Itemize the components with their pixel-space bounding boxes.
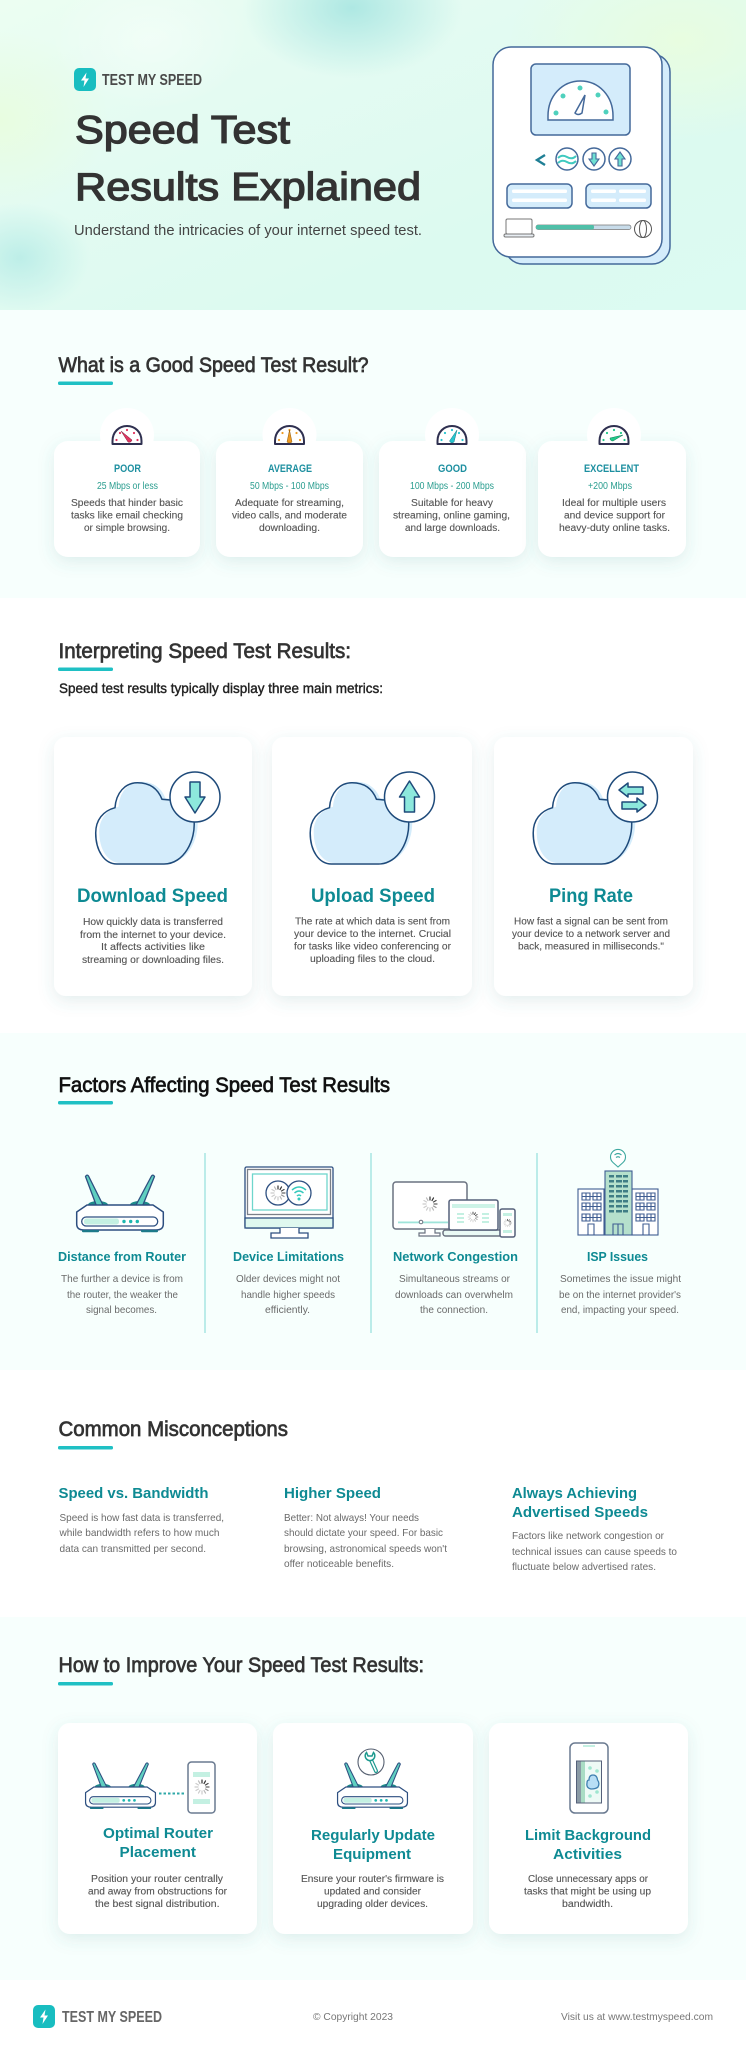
factor: network congestion (393, 1182, 518, 1316)
heading: What is a Good Speed Test Result? (58, 354, 368, 377)
card: optimal router placement (58, 1723, 257, 1934)
misconception: always achieving advertised speeds: Advertised Speeds (512, 1504, 648, 1521)
icon: devices (393, 1182, 515, 1237)
title: Speed Test (75, 109, 290, 152)
heading: Interpreting Speed Test Results: (58, 640, 351, 663)
icon: monitor (245, 1167, 333, 1238)
factor: device limitations (233, 1167, 344, 1316)
misconception: higher speed: offer noticeable benefits. (284, 1558, 394, 1570)
card: average: AVERAGE (268, 463, 312, 475)
card: upload speed: The rate at which data is sent from (295, 916, 450, 928)
icon: phone with cloud (570, 1743, 608, 1813)
illustration: speed test device (493, 47, 670, 264)
factor: network congestion: the connection. (420, 1304, 488, 1316)
icon: buildings (578, 1149, 658, 1235)
title (75, 109, 421, 209)
card: excellent: Ideal for multiple users (562, 498, 666, 509)
card: ping rate: Ping Rate (549, 886, 633, 907)
factor: device limitations: efficiently. (265, 1304, 310, 1316)
card: upload speed: your device to the internet. Crucial (294, 929, 451, 940)
misconception: higher speed: should dictate your speed. For basic (284, 1527, 443, 1539)
section: factors (0, 1033, 746, 1370)
icon: router (77, 1175, 163, 1232)
icon: router and phone (86, 1762, 215, 1813)
misconception: higher speed: Higher Speed (284, 1485, 381, 1502)
icon: cloud ping (533, 772, 658, 864)
factor: device limitations: Device Limitations (233, 1249, 344, 1264)
misconception: always achieving advertised speeds: Always Achieving (512, 1485, 637, 1502)
factor: distance from router: The further a device is from (61, 1273, 183, 1285)
card: regularly update equipment: Ensure your router's firmware is (301, 1874, 444, 1885)
card: regularly update equipment: upgrading older devices. (317, 1899, 428, 1910)
icon: cloud download (96, 772, 220, 864)
card: upload speed: for tasks like video conferencing or (294, 942, 452, 952)
brand logo: TEST MY SPEED (102, 72, 202, 89)
misconception: speed vs bandwidth: Speed vs. Bandwidth (58, 1485, 208, 1502)
card: download speed: Download Speed (77, 886, 228, 907)
misconception: speed vs bandwidth: Speed is how fast data is transferred, (60, 1512, 224, 1524)
section: improve results (0, 1617, 746, 1980)
card: optimal router placement: the best signal distribution. (95, 1899, 220, 1910)
factor: isp issues: Sometimes the issue might (560, 1273, 681, 1285)
section: interpreting results (0, 598, 746, 1033)
card: download speed: How quickly data is transferred (83, 917, 223, 928)
card: poor: 25 Mbps or less (97, 481, 158, 492)
card: download speed: from the internet to your device. (80, 930, 226, 941)
footer logo: TEST MY SPEED (62, 2009, 162, 2026)
card: poor: tasks like email checking (71, 510, 183, 522)
factor: distance from router (58, 1175, 186, 1316)
card: good: Suitable for heavy (411, 498, 493, 509)
misconception: always achieving advertised speeds: fluctuate below advertised rates. (512, 1561, 656, 1573)
card: excellent: heavy-duty online tasks. (559, 523, 670, 534)
card: download speed: It affects activities like (101, 942, 206, 953)
card: good: and large downloads. (405, 523, 500, 534)
heading underline (58, 1446, 113, 1450)
section: good speed test result (0, 310, 746, 598)
card: good (379, 408, 526, 557)
card: average: Adequate for streaming, (235, 498, 344, 509)
icon: router and wrench (338, 1749, 407, 1809)
factor: network congestion: Simultaneous streams or (399, 1273, 510, 1285)
factor: network congestion: downloads can overwhelm (395, 1289, 513, 1301)
factor: isp issues (559, 1149, 681, 1316)
card: optimal router placement: Optimal Router (103, 1825, 213, 1842)
card: good: 100 Mbps - 200 Mbps (410, 481, 494, 492)
card: upload speed (272, 737, 472, 996)
card: good: streaming, online gaming, (393, 510, 510, 522)
brand logo (74, 68, 202, 91)
card: ping rate: How fast a signal can be sent from (514, 916, 668, 928)
card: limit background activities: bandwidth. (562, 1899, 613, 1910)
card: limit background activities (489, 1723, 688, 1934)
card: poor: Speeds that hinder basic (71, 498, 183, 509)
card: regularly update equipment: updated and consider (324, 1886, 422, 1898)
misconception: always achieving advertised speeds: Factors like network congestion or (512, 1530, 664, 1542)
factor: distance from router: signal becomes. (86, 1304, 157, 1316)
factor: device limitations: Older devices might not (236, 1273, 340, 1285)
card: upload speed: Upload Speed (311, 886, 435, 907)
factor: network congestion: Network Congestion (393, 1249, 518, 1264)
footer logo (33, 2005, 162, 2028)
heading underline (58, 1682, 113, 1686)
card: excellent (538, 408, 686, 557)
misconception: higher speed (284, 1485, 447, 1570)
factor: isp issues: ISP Issues (587, 1249, 648, 1264)
misconception: higher speed: Better: Not always! Your needs (284, 1512, 419, 1524)
card: limit background activities: Activities (553, 1846, 622, 1863)
factor: isp issues: be on the internet provider's (559, 1289, 681, 1301)
card: download speed: streaming or downloading files. (82, 955, 224, 966)
card: optimal router placement: Position your router centrally (91, 1874, 223, 1885)
heading underline (58, 668, 113, 671)
card: regularly update equipment: Equipment (333, 1846, 411, 1863)
card: limit background activities: Limit Background (525, 1827, 651, 1844)
card: average: video calls, and moderate (232, 510, 348, 522)
copyright: © Copyright 2023 (313, 2011, 393, 2023)
card: average: 50 Mbps - 100 Mbps (250, 481, 329, 492)
card: excellent: and device support for (564, 510, 666, 522)
card: good: GOOD (438, 463, 467, 475)
heading: Common Misconceptions (58, 1418, 288, 1441)
factor: isp issues: end, impacting your speed. (561, 1304, 679, 1316)
misconception: speed vs bandwidth (58, 1485, 224, 1555)
card: ping rate (494, 737, 693, 996)
card: optimal router placement: and away from obstructions for (88, 1886, 228, 1898)
card: excellent: EXCELLENT (584, 463, 639, 475)
misconception: speed vs bandwidth: data can transmitted per second. (60, 1543, 206, 1555)
misconception: always achieving advertised speeds (512, 1485, 677, 1573)
misconception: speed vs bandwidth: while bandwidth refers to how much (59, 1527, 220, 1539)
card: poor: POOR (114, 463, 141, 475)
footer (0, 1980, 746, 2048)
card: regularly update equipment (273, 1723, 473, 1934)
icon: cloud upload (310, 772, 434, 864)
card: limit background activities: tasks that might be using up (524, 1886, 652, 1898)
heading underline (58, 382, 113, 385)
card: average (216, 408, 363, 557)
card: ping rate: your device to a network server and (512, 929, 670, 940)
card: poor (54, 408, 200, 557)
factor: distance from router: the router, the weaker the (67, 1289, 178, 1301)
factor: device limitations: handle higher speeds (241, 1289, 335, 1301)
heading: How to Improve Your Speed Test Results: (58, 1654, 424, 1677)
misconception: always achieving advertised speeds: technical issues can cause speeds to (512, 1546, 677, 1558)
heading: Factors Affecting Speed Test Results (58, 1074, 390, 1097)
heading underline (58, 1101, 113, 1104)
card: limit background activities: Close unnecessary apps or (528, 1874, 649, 1885)
hero banner (0, 0, 746, 313)
subtitle: Understand the intricacies of your internet speed test. (74, 222, 422, 239)
website: Visit us at www.testmyspeed.com (561, 2011, 713, 2023)
misconception: higher speed: browsing, astronomical speeds won't (284, 1543, 447, 1555)
factor: distance from router: Distance from Router (58, 1249, 186, 1264)
section: common misconceptions (0, 1370, 746, 1617)
card: ping rate: back, measured in milliseconds." (518, 942, 665, 952)
card: average: downloading. (259, 523, 320, 534)
card: regularly update equipment: Regularly Update (311, 1827, 435, 1844)
card: download speed (54, 737, 252, 996)
title: Results Explained (75, 166, 421, 209)
card: optimal router placement: Placement (120, 1844, 196, 1861)
card: poor: or simple browsing. (84, 523, 170, 534)
intro text: Speed test results typically display three main metrics: (59, 680, 383, 696)
card: excellent: +200 Mbps (588, 481, 632, 492)
card: upload speed: uploading files to the cloud. (310, 954, 435, 965)
